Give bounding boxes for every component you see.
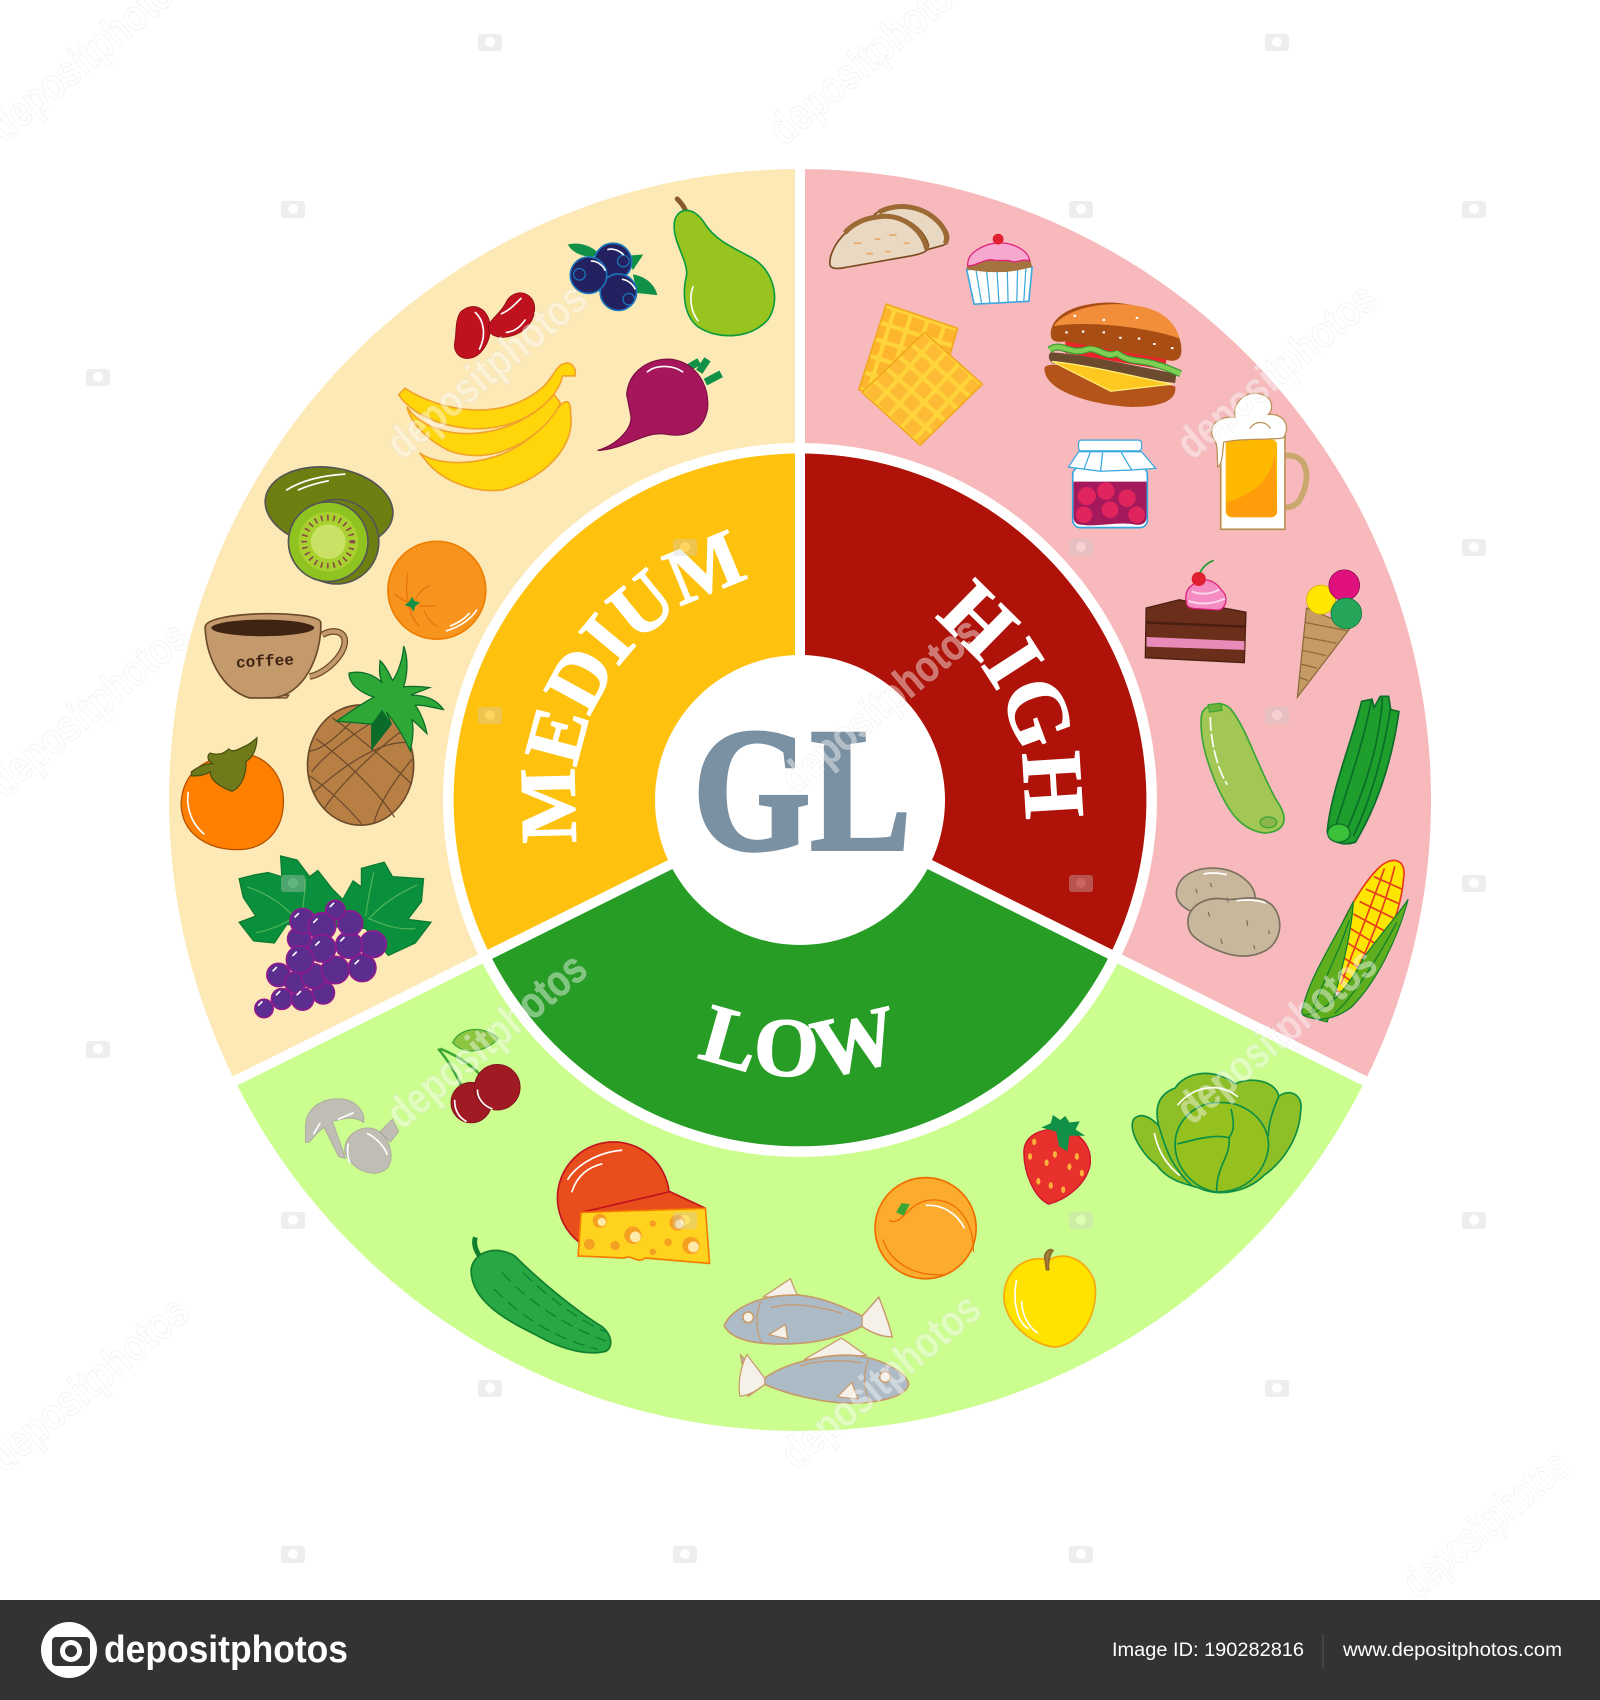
title: GL: GL: [693, 693, 911, 888]
ring segment: low: [490, 800, 1110, 1146]
icon: potatoes: [1176, 868, 1280, 956]
panel: outer food wheel: [169, 169, 1431, 1431]
icon: chocolate cake slice: [1145, 560, 1246, 663]
icon: orange: [388, 541, 486, 639]
sector: low foods background: [235, 800, 1365, 1431]
low foods group right and high foods lower: [724, 860, 1408, 1403]
icon: grapes with leaves: [239, 856, 431, 1018]
watermarks: depositphotos: [1167, 938, 1386, 1133]
icon: persimmon: [181, 738, 283, 850]
icon: bananas: [399, 363, 575, 491]
icon: cucumber: [471, 1237, 611, 1353]
image id: Image ID: 190282816: [1112, 1640, 1304, 1661]
icon: jam jar: [1069, 440, 1156, 528]
icon: cupcake: [967, 234, 1032, 304]
coffee label: coffee: [236, 652, 294, 673]
icon: depositphotos logo: [41, 1622, 97, 1678]
high foods group: [830, 206, 1399, 844]
label: LOW: LOW: [697, 1004, 890, 1078]
icon: leek: [1327, 696, 1399, 844]
icon: cabbage: [1132, 1073, 1301, 1193]
icon: pear: [674, 199, 775, 336]
medium foods group: [181, 199, 775, 850]
sector: high foods background: [800, 169, 1431, 1081]
icon: strawberry: [1024, 1115, 1090, 1204]
website: www.depositphotos.com: [1342, 1640, 1562, 1661]
icon: beetroot: [598, 359, 721, 451]
icon: kidney beans: [454, 293, 535, 359]
center circle: [655, 655, 945, 945]
watermarks: depositphotos: [1167, 273, 1386, 468]
low foods group left: [239, 856, 710, 1353]
icon: zucchini: [1201, 703, 1284, 833]
ring segment: medium: [454, 454, 800, 955]
icon: burger: [1044, 303, 1181, 407]
footer bar: [0, 1600, 1600, 1700]
watermarks: depositphotos: [377, 943, 596, 1138]
icon: ice cream cone: [1297, 570, 1362, 697]
icon: waffles: [859, 304, 982, 445]
panel: inner GL ring: [454, 454, 1146, 1146]
brand name: depositphotos: [104, 1629, 348, 1671]
icon: bread: [830, 206, 949, 268]
icon: blueberries: [568, 243, 657, 310]
icon: kiwi: [260, 459, 398, 584]
icon: cherries: [438, 1029, 520, 1123]
watermarks: depositphotos: [771, 1283, 990, 1478]
sector: medium foods background: [169, 169, 800, 1081]
watermarks: depositphotos: [771, 607, 990, 802]
icon: pineapple: [308, 646, 443, 825]
watermarks: depositphotos: [377, 273, 596, 468]
ring segment: high: [800, 454, 1146, 955]
icon: corn: [1302, 860, 1408, 1022]
icon: beer mug: [1212, 393, 1306, 529]
icon: peach: [875, 1178, 976, 1279]
label: HIGH: HIGH: [934, 576, 1084, 820]
icon: cheese: [557, 1142, 710, 1263]
icon: yellow apple: [1004, 1250, 1095, 1347]
icon: coffee cup: [205, 614, 345, 698]
icon: mushrooms: [305, 1099, 399, 1173]
label: MEDIUM: MEDIUM: [521, 529, 748, 844]
icon: upper fish: [724, 1279, 892, 1344]
icon: lower fish: [739, 1338, 909, 1403]
